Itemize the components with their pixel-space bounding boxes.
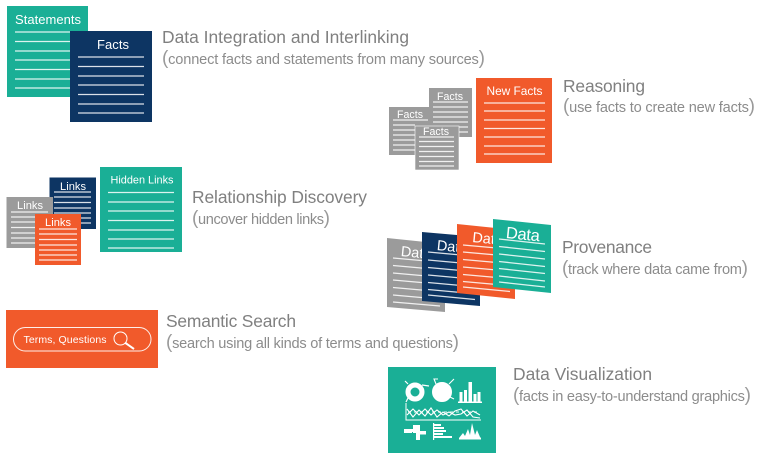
panel: reasoning [389,76,755,170]
panel: data visualization [388,364,751,453]
pie chart [432,379,454,402]
bar chart [458,382,482,403]
panel: relationship discovery [6,167,367,265]
heading: relationship discovery: Relationship Discovery [192,187,367,207]
icon: left facts document: Facts [397,109,423,121]
icon: navy links document [50,178,96,229]
icon: orange data sheet [457,224,515,299]
heading: reasoning: Reasoning [563,76,645,96]
icon: statements document [7,6,88,97]
search box: Terms, Questions [24,334,106,346]
icon: facts document: Facts [97,37,130,52]
icon: orange links document: Links [45,217,71,229]
heading: semantic search: Semantic Search [166,311,296,331]
icon: teal data sheet [493,219,551,293]
line chart [406,403,481,420]
icon: front facts document: Facts [423,126,449,138]
search box [6,310,158,368]
donut chart [405,381,429,402]
icon: magnifier [114,332,134,349]
heading: data integration: Data Integration and Interlinking [162,27,409,47]
icon: navy data sheet [422,232,480,306]
icon: orange links document [35,214,81,265]
panel: provenance [387,219,748,312]
icon: gray links document: Links [17,200,43,212]
text: data visualization description: (facts in easy-to-understand graphics) [513,385,751,406]
icon: chart collection [388,367,496,453]
heading: data visualization: Data Visualization [513,364,652,384]
icon: gray data sheet [387,238,445,312]
horizontal bar chart [433,423,452,440]
icon: navy links document: Links [60,181,86,193]
icon: front facts document [415,126,459,170]
icon: back facts document: Facts [437,91,463,103]
icon: orange data sheet: Dat [472,230,496,248]
panel: data integration [7,6,485,122]
heading: provenance: Provenance [562,237,652,257]
panel: semantic search [6,310,459,368]
icon: hidden links document [100,167,182,252]
icon: gray data sheet: Dat [400,244,424,262]
text: provenance description: (track where data came from) [562,258,748,279]
icon: navy data sheet: Dat [436,238,460,256]
icon: facts document [70,31,152,122]
text: relationship discovery description: (uncover hidden links) [192,208,330,229]
icon: new facts document [476,78,552,163]
diverging bar chart [404,425,426,440]
area chart [459,423,481,440]
text: data integration description: (connect facts and statements from many sources) [162,48,485,69]
icon: teal data sheet: Data [505,224,541,245]
icon: hidden links document: Hidden Links [110,174,174,186]
icon: left facts document [389,107,432,155]
text: semantic search description: (search using all kinds of terms and questions) [166,332,459,353]
icon: gray links document [6,197,53,248]
icon: new facts document: New Facts [486,84,543,98]
icon: statements document: Statements [15,12,82,27]
text: reasoning description: (use facts to create new facts) [563,96,755,117]
icon: back facts document [429,88,472,137]
